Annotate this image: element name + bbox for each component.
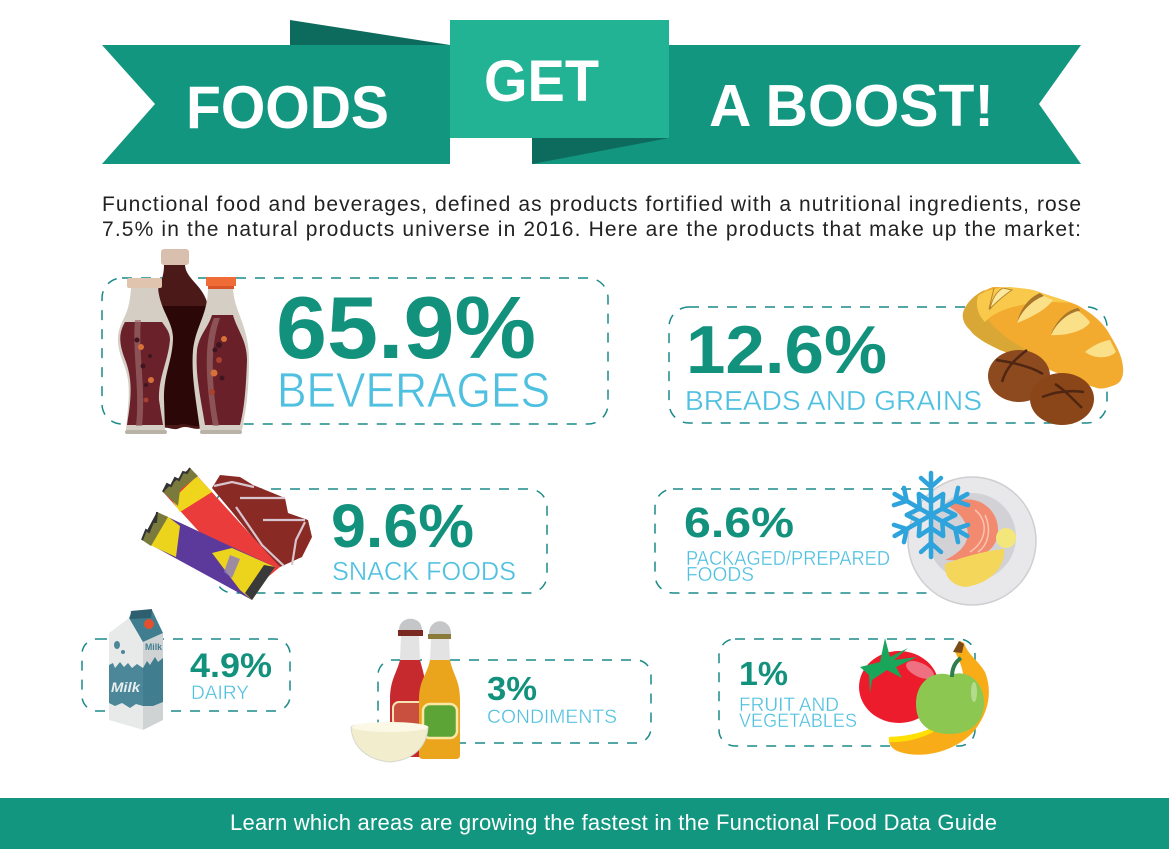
fruit label: [739, 695, 857, 732]
panel: breads and grains: [669, 287, 1123, 425]
snack label: SNACK FOODS: [332, 556, 516, 586]
title word get: GET: [484, 49, 599, 114]
fruit value: 1%: [739, 655, 788, 692]
banner left ribbon: [102, 45, 450, 164]
icon: soda bottles: [118, 249, 249, 434]
panel: dairy: [82, 609, 290, 730]
snack value: 9.6%: [331, 492, 474, 560]
icon: tomato apple banana: [859, 638, 989, 755]
beverages value: 65.9%: [276, 278, 536, 377]
breads value: 12.6%: [686, 312, 887, 388]
dairy label: DAIRY: [191, 683, 249, 704]
icon: milk carton: [109, 609, 163, 730]
packaged label: PACKAGED/PREPARED: [686, 547, 890, 570]
banner centre panel: [450, 20, 669, 138]
intro text: Functional food and beverages, defined as products fortified with a nutritional ingredients, rose: [102, 193, 1081, 216]
icon: plate with salmon and snowflake: [889, 473, 1036, 605]
condiments label: CONDIMENTS: [487, 707, 617, 728]
beverages label: BEVERAGES: [277, 364, 550, 418]
title banner: [102, 20, 1081, 164]
banner right fold: [532, 138, 669, 164]
title word foods: FOODS: [186, 74, 389, 141]
panel: condiments: [351, 619, 651, 762]
packaged value: 6.6%: [684, 499, 794, 547]
footer text: Learn which areas are growing the fastest in the Functional Food Data Guide: [230, 810, 997, 835]
panel: beverages: [102, 249, 608, 434]
panel: fruit and vegetables: [719, 638, 989, 755]
icon: snack bars: [142, 468, 312, 600]
packaged label: [686, 547, 890, 586]
milk carton label: Milk: [111, 679, 141, 695]
banner right ribbon: [532, 45, 1081, 164]
footer band: [0, 798, 1169, 849]
intro text: 7.5% in the natural products universe in 2016. Here are the products that make up the market:: [102, 218, 1081, 241]
title words a boost: A BOOST!: [709, 73, 994, 139]
fruit label: FRUIT AND: [739, 695, 839, 716]
fruit label: VEGETABLES: [739, 711, 857, 732]
icon: bread loaf and rolls: [963, 287, 1123, 425]
milk carton side label: Milk: [145, 642, 163, 652]
panel: snack foods: [142, 468, 547, 600]
breads label: BREADS AND GRAINS: [685, 385, 982, 416]
banner left fold: [290, 20, 450, 45]
packaged label: FOODS: [686, 563, 754, 586]
intro text: [102, 193, 1081, 241]
dairy value: 4.9%: [190, 647, 272, 685]
condiments value: 3%: [487, 670, 537, 707]
panel: packaged foods: [655, 473, 1036, 605]
icon: sauce bottles and bowl: [351, 619, 460, 762]
